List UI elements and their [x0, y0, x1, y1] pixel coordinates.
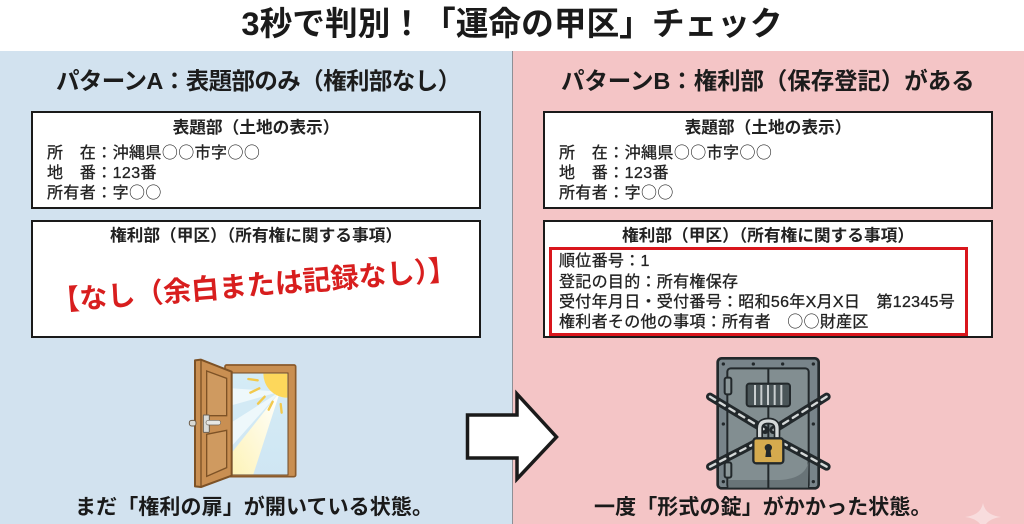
heading: pattern A: パターンA：表題部のみ（権利部なし） — [56, 68, 460, 94]
lot number row: 地 番：123番 — [47, 165, 157, 182]
box: B title section — [543, 111, 993, 209]
red highlighted record — [549, 247, 968, 336]
box: B rights section — [543, 220, 993, 338]
panel: pattern A — [0, 51, 512, 524]
box heading: 権利部（甲区）（所有権に関する事項） — [110, 226, 402, 245]
caption: pattern A: まだ「権利の扉」が開いている状態。 — [75, 496, 433, 519]
heading: pattern B: パターンB：権利部（保存登記）がある — [561, 68, 974, 94]
location row: 所 在：沖縄県○○市字○○ — [559, 139, 772, 163]
title: 3秒で判別！「運命の甲区」チェック — [241, 5, 783, 42]
caption: pattern B: 一度「形式の錠」がかかった状態。 — [594, 496, 932, 519]
purpose of registration: 登記の目的：所有権保存 — [559, 274, 738, 291]
red statement: none: 【なし（余白または記録なし）】 — [50, 254, 458, 317]
box: A title section — [31, 111, 481, 209]
box heading: 表題部（土地の表示） — [685, 118, 851, 137]
rights holder: 権利者その他の事項：所有者 ○○財産区 — [559, 308, 869, 332]
owner row: 所有者：字○○ — [559, 179, 674, 203]
rank number: 順位番号：1 — [559, 253, 650, 270]
icon: open door with sunlight — [188, 358, 296, 488]
location row: 所 在：沖縄県○○市字○○ — [47, 139, 260, 163]
lot number row: 地 番：123番 — [559, 165, 669, 182]
panel: pattern B — [512, 51, 1024, 524]
receipt date and number: 受付年月日・受付番号：昭和56年X月X日 第12345号 — [559, 294, 955, 311]
arrow: from A to B — [466, 390, 559, 484]
owner row: 所有者：字○○ — [47, 179, 162, 203]
box: A rights section — [31, 220, 481, 338]
box heading: 権利部（甲区）（所有権に関する事項） — [622, 226, 914, 245]
box heading: 表題部（土地の表示） — [173, 118, 339, 137]
icon: sparkle — [966, 504, 1000, 524]
icon: locked chained door — [706, 357, 831, 490]
